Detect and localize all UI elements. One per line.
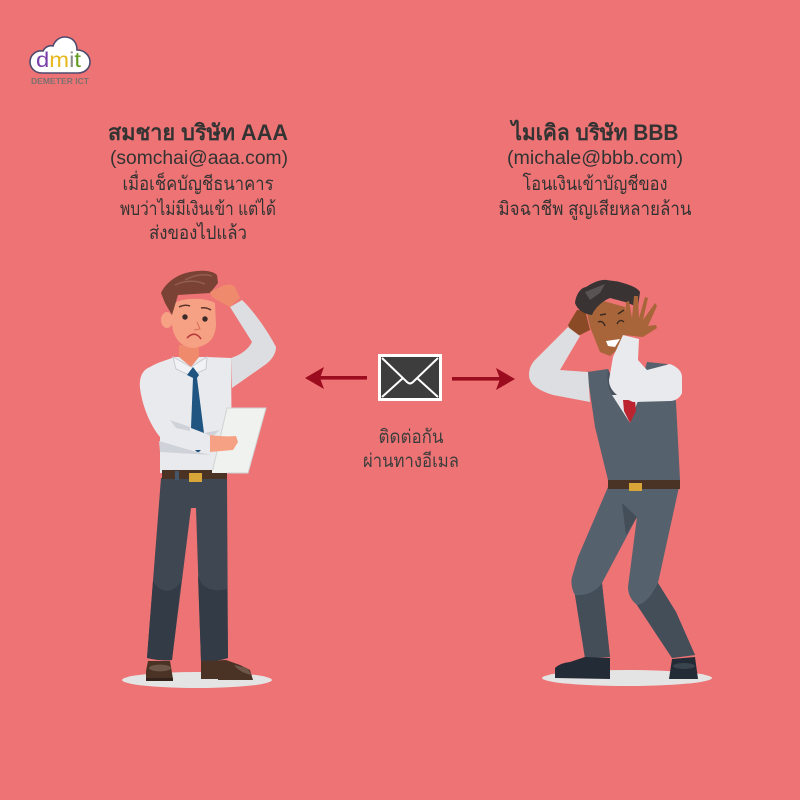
text block: Michale: โอนเงินเข้าบัญชีของ [522,172,668,195]
text block: Somchai [108,120,288,244]
text block: Somchai: ส่งของไปแล้ว [149,222,247,244]
arrow: left to Somchai [305,367,367,389]
logo: dmit cloud: DEMETER ICT [31,77,89,86]
caption: contact by email: ติดต่อกัน [378,427,444,448]
text block: Somchai: (somchai@aaa.com) [110,148,288,169]
logo: dmit cloud [30,37,90,86]
figure: distressed man holding head [529,280,712,686]
text block: Michale [498,119,692,220]
text block: Michale: (michale@bbb.com) [507,148,683,169]
text block: Michale: ไมเคิล บริษัท BBB [510,119,678,145]
text block: Somchai: เมื่อเช็คบัญชีธนาคาร [122,170,274,195]
caption: contact by email: ผ่านทางอีเมล [363,450,459,472]
text block: Somchai: สมชาย บริษัท AAA [108,120,288,145]
caption: contact by email [363,427,459,472]
figure: worried man with paper [122,271,276,688]
logo: dmit cloud: dmit [36,49,81,72]
icon: envelope [378,354,442,401]
arrow: right to Michale [452,368,515,390]
text block: Michale: มิจฉาชีพ สูญเสียหลายล้าน [498,198,692,220]
text block: Somchai: พบว่าไม่มีเงินเข้า แต่ได้ [120,198,276,220]
